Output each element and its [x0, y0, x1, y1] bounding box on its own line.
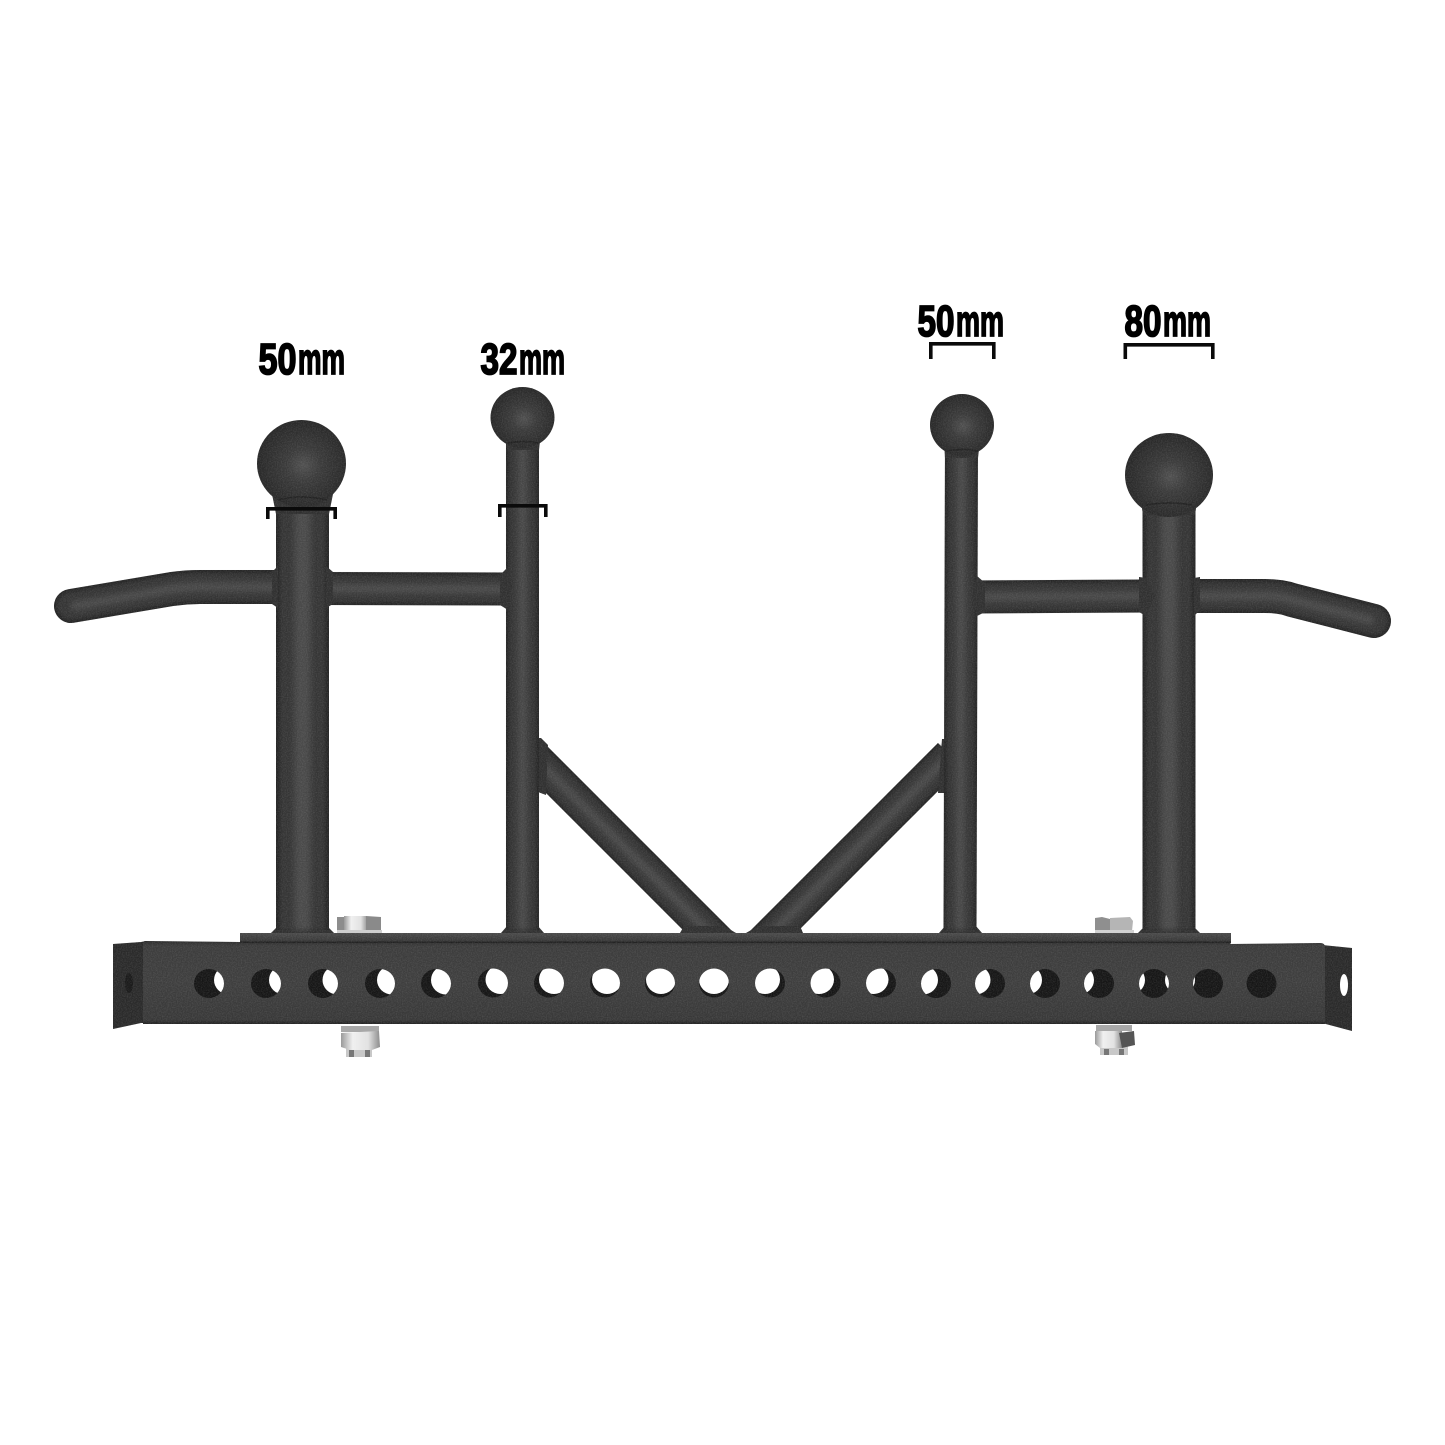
bracket: 80mm: [1125, 345, 1213, 359]
label: 80mm: mm: [1163, 297, 1211, 346]
dimension: 50mm inner right: [918, 297, 1004, 359]
ball: inner left 32mm: [490, 387, 554, 450]
row of punched holes: [194, 968, 1276, 998]
left diagonal brace: [530, 738, 736, 945]
post: inner right: [939, 440, 985, 933]
dimension: 32mm: [480, 335, 565, 517]
bracket: 50mm inner right: [931, 344, 994, 359]
right wall flange: [1322, 945, 1352, 1031]
post: far right: [1138, 500, 1200, 933]
dimension: 50mm far left: [258, 335, 345, 519]
bracket: 32mm: [500, 506, 546, 517]
icon: left bottom nut: [341, 1026, 380, 1057]
post: far left: [271, 490, 334, 933]
pull-up rig frame: [71, 387, 1374, 1031]
icon: left top bolt: [337, 916, 382, 933]
mounting plate: [240, 933, 1231, 944]
label: 32mm: mm: [519, 335, 565, 384]
label: 32mm: 32: [480, 335, 518, 384]
left wall flange: [113, 941, 146, 1029]
left handle and crossbar: [71, 587, 510, 606]
label: 80mm: 80: [1124, 297, 1162, 346]
ball: far left 50mm: [257, 420, 346, 514]
right diagonal brace: [746, 739, 957, 945]
icon: right top bolt: [1095, 917, 1134, 933]
label: 50mm: 50: [918, 297, 954, 346]
right handle and crossbar: [970, 596, 1374, 621]
bolts behind the mounting bar: [337, 916, 1135, 1057]
dimension: 80mm: [1124, 297, 1213, 359]
label: 50mm: mm: [298, 335, 345, 384]
ball: far right 80mm: [1125, 433, 1213, 517]
icon: right bottom nut: [1095, 1025, 1135, 1055]
perforated square tube: [143, 941, 1325, 1024]
infographic canvas: [54, 304, 1391, 1057]
label: 50mm: 50: [258, 335, 296, 384]
ball: inner right 50mm: [930, 394, 994, 458]
post: inner left: [500, 430, 544, 933]
label: 50mm: mm: [956, 297, 1004, 346]
bracket: 50mm far left: [268, 509, 335, 519]
